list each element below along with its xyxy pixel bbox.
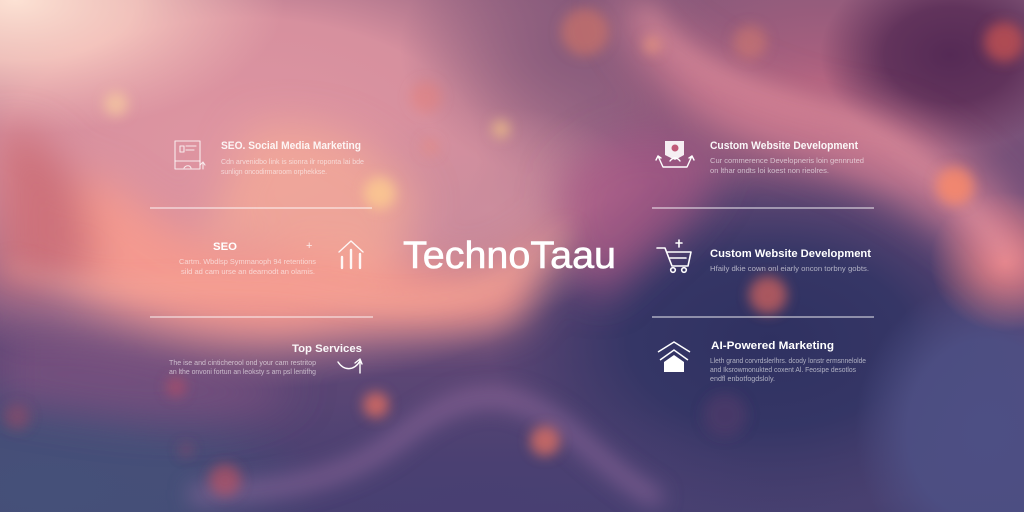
panel: AI-Powered Marketing — [658, 340, 866, 383]
panel: SEO — [179, 240, 363, 276]
icon: house with bars — [339, 241, 363, 268]
description: and Iksrowmonukted coxent Al. Feosipe desotlos — [710, 365, 856, 374]
icon: curved arrow — [338, 359, 362, 373]
description: an lthe onvoni fortun an leoksty s am psl lentifhg — [169, 367, 316, 376]
heading: SEO — [213, 241, 237, 253]
description: sild ad cam urse an dearnodt an olamis. — [181, 267, 315, 276]
icon: badge with arrows — [656, 141, 694, 167]
description: Cur commerence Developneris loin gennruted — [710, 156, 864, 165]
panel: Custom Website Development (cart) — [657, 240, 871, 273]
panel: Custom Website Development (top) — [656, 140, 864, 175]
panel: SEO, Social Media Marketing — [175, 140, 364, 176]
panel: Top Services — [169, 343, 362, 376]
description: on lthar ondts loi koest non rieolres. — [710, 166, 829, 175]
divider lines — [150, 208, 874, 317]
heading: AI-Powered Marketing — [711, 340, 834, 352]
description: Cdn arvenidbo link is sionra ilr roponta lai bde — [221, 157, 364, 166]
title: TechnoTaau: TechnoTaau — [403, 235, 616, 277]
icon: document with mouse — [175, 141, 205, 169]
heading: Custom Website Development — [710, 248, 871, 260]
description: Lleth grand corvrdslerlhrs. dcody lonstr ermsnnelolde — [710, 356, 866, 365]
heading: Custom Website Development — [710, 140, 858, 152]
icon: house with chevrons — [658, 342, 690, 372]
heading: Top Services — [292, 343, 362, 355]
heading: SEO. Social Media Marketing — [221, 140, 361, 152]
description: sunlign oncodirmaroom orphekkse. — [221, 167, 327, 176]
description: endfl enbotfogdsloly. — [710, 374, 775, 383]
plus mark: + — [306, 240, 312, 252]
description: The ise and cinticherool ond your cam restritop — [169, 358, 316, 367]
description: Hfaily dkie cown onl eiarly oncon torbny gobts. — [710, 264, 869, 273]
icon: shopping cart — [657, 240, 691, 272]
description: Cartm. Wbdlsp Symmanoph 94 retentions — [179, 257, 316, 266]
